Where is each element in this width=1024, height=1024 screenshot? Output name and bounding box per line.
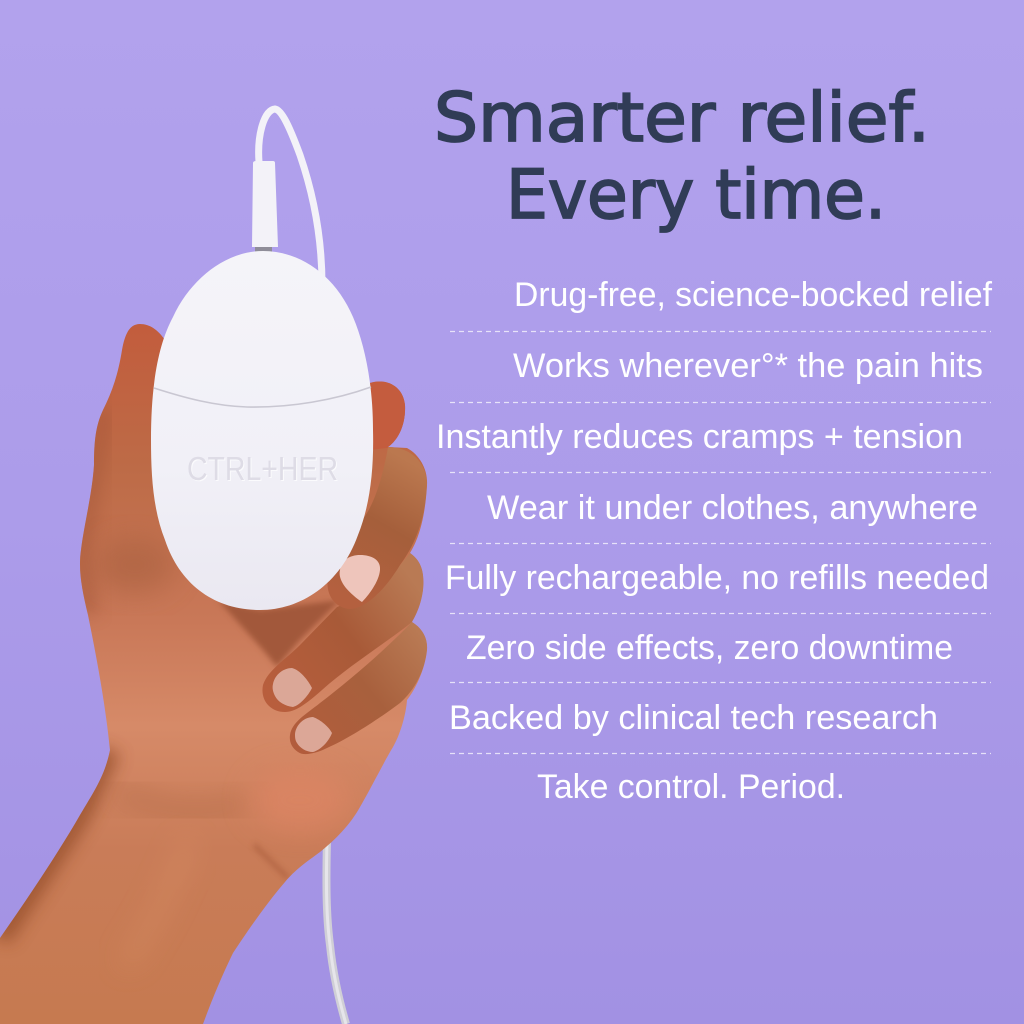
benefit list: Instantly reduces cramps + tension	[436, 418, 963, 456]
middle finger nail	[273, 668, 312, 707]
benefit list: Zero side effects, zero downtime	[466, 629, 953, 667]
lower cable	[326, 840, 346, 1024]
device body	[151, 251, 373, 610]
upper cable	[259, 109, 322, 285]
title	[434, 79, 930, 235]
device logo: CTRL+HER	[187, 450, 338, 487]
benefit list: Wear it under clothes, anywhere	[487, 489, 978, 527]
connector	[252, 161, 278, 252]
benefit list: Backed by clinical tech research	[449, 699, 938, 737]
benefit list: Works wherever°* the pain hits	[513, 347, 983, 385]
thumb nail	[340, 555, 380, 602]
benefit list	[436, 276, 993, 806]
device seam	[154, 387, 371, 407]
hand shading	[0, 410, 350, 965]
benefit list: Fully rechargeable, no refills needed	[445, 559, 989, 597]
ring finger nail	[295, 717, 332, 752]
ring finger	[290, 622, 427, 754]
benefit list: Drug-free, science-bocked relief	[514, 276, 993, 314]
hand	[0, 300, 440, 1024]
title: Smarter relief.	[434, 79, 930, 158]
device logo: CTRL+HER	[188, 451, 339, 488]
thumb	[327, 447, 427, 609]
benefit list: Take control. Period.	[537, 768, 845, 806]
finger behind device	[370, 382, 406, 450]
palm hollow	[218, 600, 340, 667]
title: Every time.	[506, 156, 886, 235]
middle finger	[262, 553, 423, 712]
